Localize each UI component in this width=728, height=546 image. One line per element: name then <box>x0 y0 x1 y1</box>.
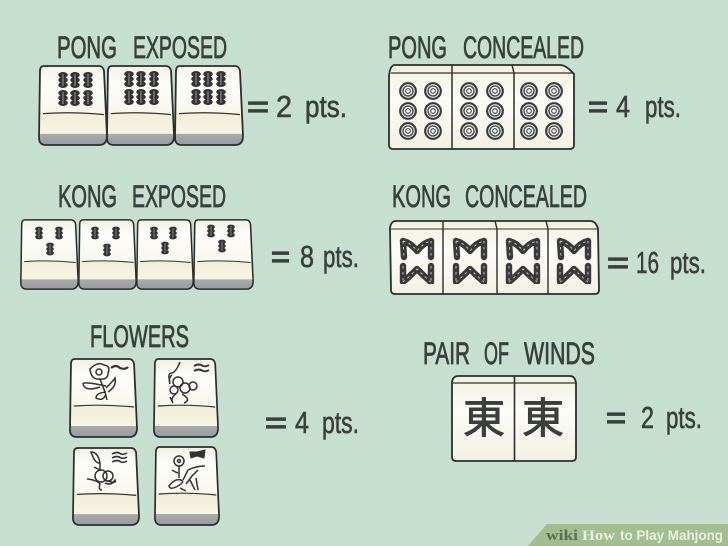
score: 2 pts: = <box>247 89 269 124</box>
score: 4 pts: 4 <box>295 405 309 440</box>
flower 4 <box>169 450 205 491</box>
heading: pong exposed: EXPOSED <box>133 29 227 65</box>
tiles: two east wind tiles: 東 <box>522 385 564 446</box>
footer: wikiHow banner: to Play Mahjong <box>620 527 723 543</box>
score: 4 pts: = <box>265 405 287 440</box>
heading: pong concealed: CONCEALED <box>463 29 584 65</box>
tiles: two east wind tiles <box>452 376 576 461</box>
flower 2 <box>169 362 209 403</box>
panel: kong concealed <box>390 178 706 294</box>
tiles: four concealed bamboo tiles <box>390 221 599 294</box>
heading: pair of winds: OF <box>484 335 509 371</box>
tiles: three concealed circle tiles <box>389 65 574 149</box>
footer: wikiHow banner <box>528 524 728 546</box>
heading: kong concealed: KONG <box>392 178 451 214</box>
tiles: four flower tiles <box>69 358 220 526</box>
panel: kong exposed <box>20 178 359 290</box>
heading: kong exposed <box>58 178 226 214</box>
panel: pong concealed <box>388 29 681 149</box>
footer: wikiHow banner: wiki <box>546 528 578 544</box>
heading: pong concealed <box>388 29 584 65</box>
heading: kong concealed: CONCEALED <box>465 178 587 214</box>
score: 16 pts: = <box>607 245 629 280</box>
score: 4 pts: 4 <box>616 89 630 124</box>
heading: pong exposed <box>57 29 227 65</box>
score: 16 pts: 16 <box>636 245 659 280</box>
score: 8 pts: 8 <box>300 239 314 274</box>
score: 2 pts: = <box>606 400 626 435</box>
heading: kong exposed: EXPOSED <box>132 178 226 214</box>
heading: pair of winds <box>423 335 595 371</box>
score: 2 pts <box>247 89 347 124</box>
tiles: two east wind tiles: 東 <box>463 385 505 446</box>
heading: kong exposed: KONG <box>58 178 117 214</box>
tiles: three exposed bamboo tiles <box>38 65 244 146</box>
score: 2 pts: 2 <box>641 400 654 435</box>
heading: pong exposed: PONG <box>57 29 117 65</box>
panel: pair of winds <box>423 335 702 461</box>
heading: pair of winds: PAIR <box>423 335 470 371</box>
score: 2 pts <box>606 400 702 435</box>
panel: flowers <box>69 318 359 526</box>
score: 8 pts: pts. <box>323 239 359 274</box>
score: 2 pts: 2 <box>276 89 292 124</box>
score: 2 pts: pts. <box>305 89 347 124</box>
heading: kong concealed <box>392 178 587 214</box>
flower 1 <box>83 364 128 400</box>
score: 4 pts <box>265 405 359 440</box>
score: 2 pts: pts. <box>666 400 702 435</box>
flower 3 <box>87 452 127 490</box>
score: 8 pts: = <box>271 239 290 274</box>
score: 4 pts: pts. <box>645 89 681 124</box>
footer: wikiHow banner: How <box>582 528 615 544</box>
score: 8 pts <box>271 239 359 274</box>
heading: flowers: FLOWERS <box>90 318 189 354</box>
panel: pong exposed <box>38 29 347 146</box>
heading: pair of winds: WINDS <box>524 335 595 371</box>
score: 16 pts <box>607 245 706 280</box>
tiles: four exposed bamboo tiles <box>20 219 254 290</box>
score: 4 pts: = <box>588 89 608 124</box>
score: 16 pts: pts. <box>670 245 706 280</box>
heading: pong concealed: PONG <box>388 29 447 65</box>
score: 4 pts: pts. <box>322 405 359 440</box>
score: 4 pts <box>588 89 681 124</box>
